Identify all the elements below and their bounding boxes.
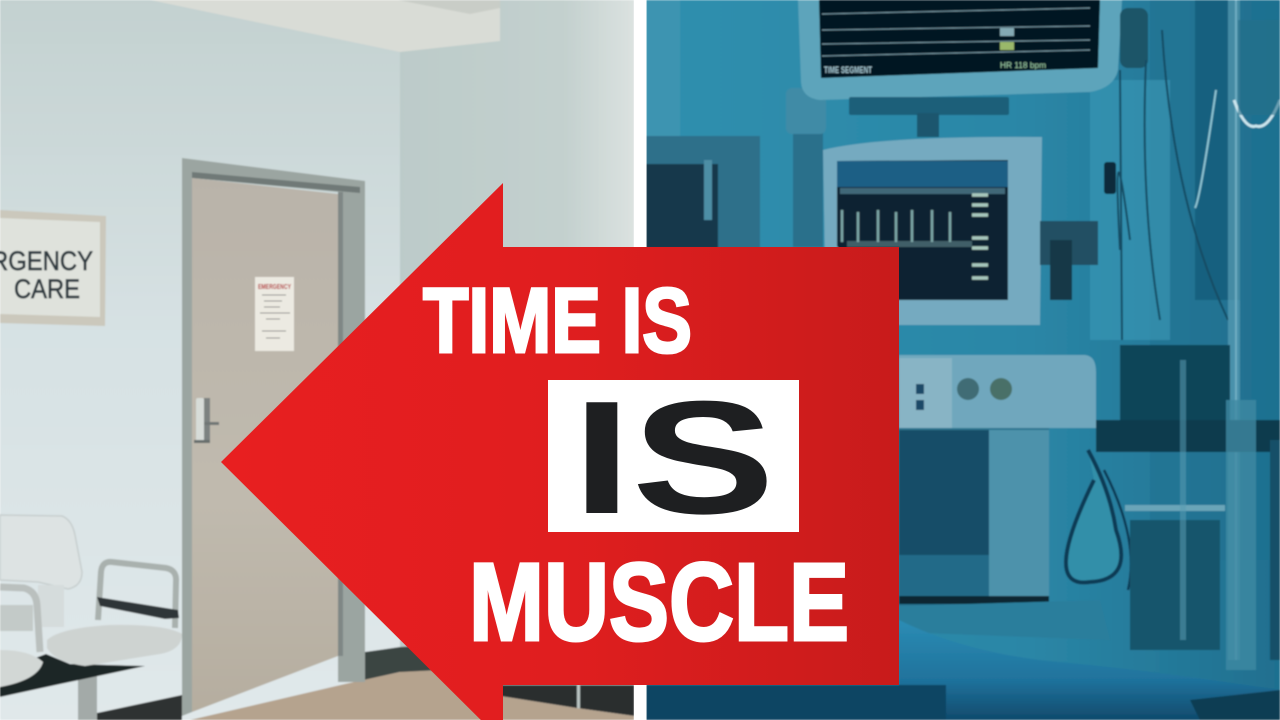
wall plug and cables [1040,0,1240,660]
chair leg [78,675,97,720]
rear armrest [98,562,176,628]
wall sign: CARE [14,274,80,304]
upper patient monitor [798,0,1148,100]
right stand [1125,360,1280,670]
rear arm pad [97,597,179,619]
red left arrow [221,183,899,720]
door notice: EMERGENCY [258,284,291,291]
highlight box: IS: IS [572,368,775,548]
upper patient monitor: HR 118 bpm [1000,61,1046,70]
highlight box: IS [548,368,799,548]
front seat [0,650,43,687]
waiting room chairs [0,515,182,720]
floor [190,668,634,720]
headline: TIME IS: TIME IS [423,270,692,372]
left background monitor [646,136,760,248]
baseboard [365,645,440,680]
bench bar [0,654,145,697]
upper patient monitor: TIME SEGMENT [824,65,872,75]
monitor mount [849,97,1009,137]
equipment shelf [899,345,1280,452]
center divider [634,0,646,720]
door notice [255,277,294,351]
front armrest [0,587,40,652]
IV bag [1234,20,1280,126]
door [192,178,338,712]
door frame [182,158,365,716]
ceiling tile [150,0,500,52]
panel: waiting room photo [0,0,634,720]
patient bed [646,620,1280,720]
wall sign [0,210,106,326]
lower equipment cabinet [899,428,1110,640]
seat [47,625,182,666]
lower patient monitor [823,137,1042,325]
back wall right of door [400,0,634,690]
panel: ICU photo [646,0,1280,720]
headline: MUSCLE: MUSCLE [469,541,849,664]
pole [793,105,823,247]
back rest [0,515,82,589]
door handle [194,398,219,443]
hanging cable loop [1066,450,1131,590]
